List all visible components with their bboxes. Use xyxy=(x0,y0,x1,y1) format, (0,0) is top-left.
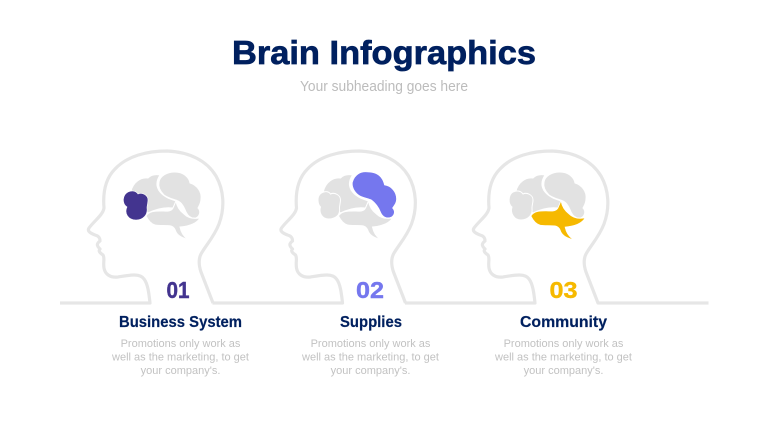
body text xyxy=(301,338,439,377)
brain lobe: top right xyxy=(159,172,201,218)
brain lobe: top right highlighted xyxy=(352,172,396,218)
body text: Promotions only work as xyxy=(121,338,241,350)
brain lobe: parietal xyxy=(324,175,368,213)
brain lobe: parietal xyxy=(131,175,176,213)
body text: your company's. xyxy=(331,365,410,377)
label: Business System xyxy=(119,314,242,331)
body text: Promotions only work as xyxy=(504,338,624,350)
panel: 01 Business System xyxy=(60,151,249,377)
icon: brain 2 xyxy=(318,172,396,240)
number 02: 02 xyxy=(356,277,384,303)
panel: 02 Supplies xyxy=(212,151,439,377)
brain lobe: frontal xyxy=(318,192,340,219)
body text xyxy=(111,338,249,377)
brain lobe: bottom highlighted xyxy=(531,201,585,240)
body text xyxy=(494,338,632,377)
brain lobe: top right xyxy=(544,172,586,218)
panel: 03 Community xyxy=(405,151,708,377)
body text: well as the marketing, to get xyxy=(301,352,439,364)
number 01: 01 xyxy=(166,277,190,303)
icon: head outline 2 xyxy=(212,151,415,303)
icon: brain 1 xyxy=(123,172,201,240)
body text: your company's. xyxy=(141,365,220,377)
brain lobe: parietal xyxy=(516,175,561,213)
brain lobe: frontal xyxy=(509,191,533,220)
brain lobe: frontal highlighted xyxy=(123,191,148,220)
title: Brain Infographics xyxy=(232,34,536,71)
subheading: Your subheading goes here xyxy=(300,79,468,95)
label: Supplies xyxy=(340,314,402,331)
body text: your company's. xyxy=(524,365,603,377)
body text: well as the marketing, to get xyxy=(494,352,632,364)
brain lobe: bottom xyxy=(338,201,392,240)
icon: head outline 1 xyxy=(60,151,223,303)
label: Community xyxy=(520,314,607,331)
icon: head outline 3 xyxy=(405,151,708,303)
body text: Promotions only work as xyxy=(311,338,431,350)
body text: well as the marketing, to get xyxy=(111,352,249,364)
number 03: 03 xyxy=(550,277,578,303)
brain lobe: bottom xyxy=(146,201,200,240)
icon: brain 3 xyxy=(509,172,586,240)
